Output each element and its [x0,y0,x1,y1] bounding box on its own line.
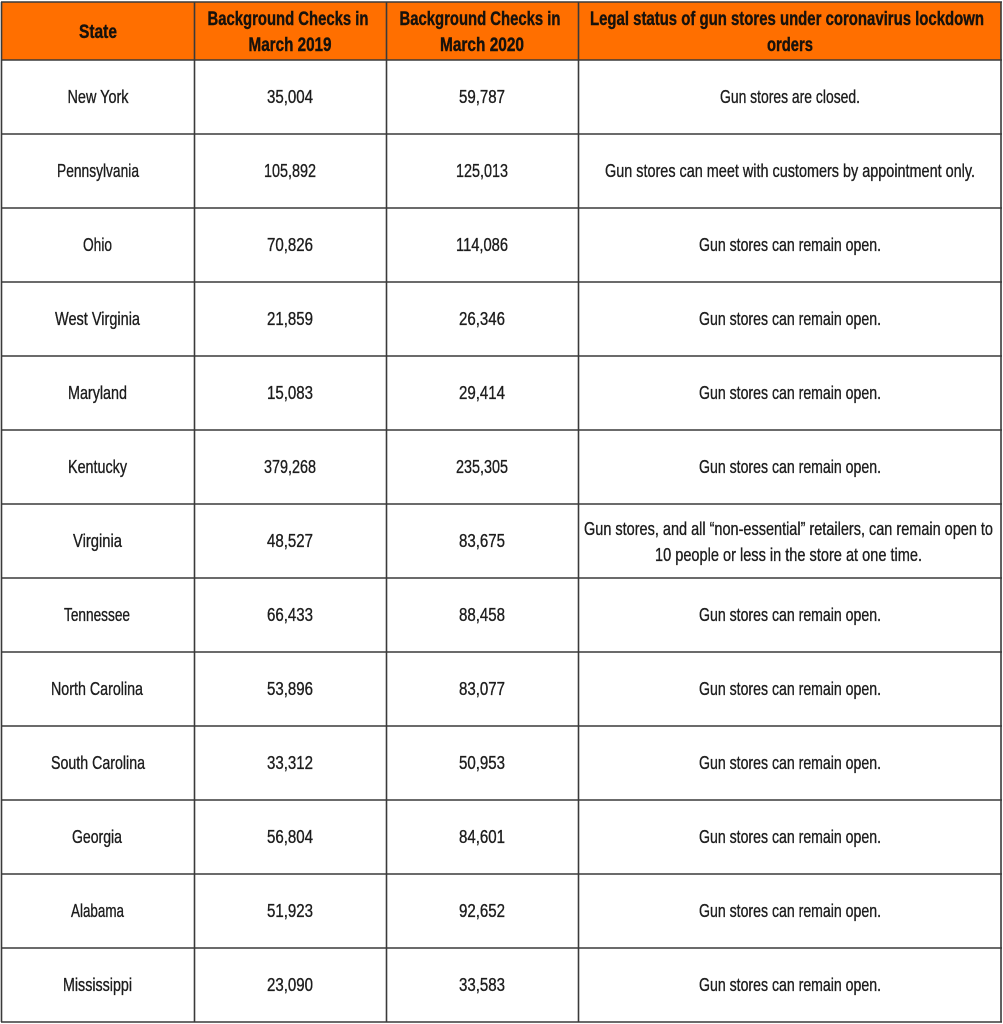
header: background checks March 2020: March 2020 [440,35,524,56]
state name: Tennessee [64,604,130,625]
March 2020 value: 59,787 [459,86,505,107]
state name: Pennsylvania [57,160,140,181]
legal status: Gun stores can remain open. [699,456,881,477]
state name: North Carolina [51,678,144,699]
header: legal status [590,9,984,56]
legal status: Gun stores can remain open. [699,308,881,329]
March 2020 value: 83,675 [459,530,505,551]
state name: Maryland [68,382,127,403]
header: background checks March 2020 [400,9,560,56]
row: Virginia [73,518,993,565]
March 2020 value: 114,086 [456,234,508,255]
row: Pennsylvania [57,160,975,181]
legal status: Gun stores can remain open. [699,678,881,699]
header: background checks March 2019: March 2019 [248,35,332,56]
state name: Ohio [83,234,112,255]
state name: Georgia [72,826,123,847]
March 2019 value: 66,433 [267,604,313,625]
row: Kentucky [68,456,881,477]
row: West Virginia [55,308,881,329]
header: background checks March 2019 [208,9,368,56]
legal status: Gun stores can remain open. [699,382,881,403]
legal status: Gun stores can remain open. [699,826,881,847]
March 2020 value: 26,346 [459,308,505,329]
row: Ohio [83,234,881,255]
header: legal status: orders [767,35,813,56]
March 2019 value: 56,804 [267,826,313,847]
header: background checks March 2019: Background Checks in [208,9,368,30]
row: Georgia [72,826,881,847]
header row [79,9,984,56]
legal status: 10 people or less in the store at one time. [655,544,922,565]
March 2020 value: 125,013 [456,160,508,181]
March 2020 value: 29,414 [459,382,505,403]
March 2020 value: 50,953 [459,752,505,773]
March 2019 value: 379,268 [264,456,316,477]
legal status [584,518,993,565]
March 2019 value: 51,923 [267,900,313,921]
state name: South Carolina [51,752,146,773]
March 2019 value: 21,859 [267,308,313,329]
header: state: State [79,22,117,43]
legal status: Gun stores are closed. [720,86,860,107]
March 2020 value: 92,652 [459,900,505,921]
March 2020 value: 33,583 [459,974,505,995]
row: Tennessee [64,604,881,625]
state name: Mississippi [63,974,132,995]
legal status: Gun stores can remain open. [699,604,881,625]
state name: West Virginia [55,308,141,329]
March 2019 value: 35,004 [267,86,313,107]
row: New York [68,86,860,107]
state name: New York [68,86,129,107]
legal status: Gun stores can remain open. [699,974,881,995]
March 2020 value: 83,077 [459,678,505,699]
March 2019 value: 23,090 [267,974,313,995]
March 2019 value: 53,896 [267,678,313,699]
state name: Kentucky [68,456,128,477]
legal status: Gun stores can remain open. [699,752,881,773]
row: North Carolina [51,678,881,699]
row: Mississippi [63,974,881,995]
state name: Virginia [73,530,123,551]
March 2019 value: 15,083 [267,382,313,403]
row: Maryland [68,382,881,403]
header: background checks March 2020: Background Checks in [400,9,560,30]
March 2020 value: 84,601 [459,826,505,847]
legal status: Gun stores can remain open. [699,900,881,921]
March 2020 value: 235,305 [456,456,508,477]
row: Alabama [71,900,881,921]
row: South Carolina [51,752,881,773]
March 2020 value: 88,458 [459,604,505,625]
March 2019 value: 105,892 [264,160,316,181]
state name: Alabama [71,900,125,921]
March 2019 value: 33,312 [267,752,313,773]
legal status: Gun stores can remain open. [699,234,881,255]
March 2019 value: 48,527 [267,530,313,551]
table header band [2,2,1001,60]
March 2019 value: 70,826 [267,234,313,255]
